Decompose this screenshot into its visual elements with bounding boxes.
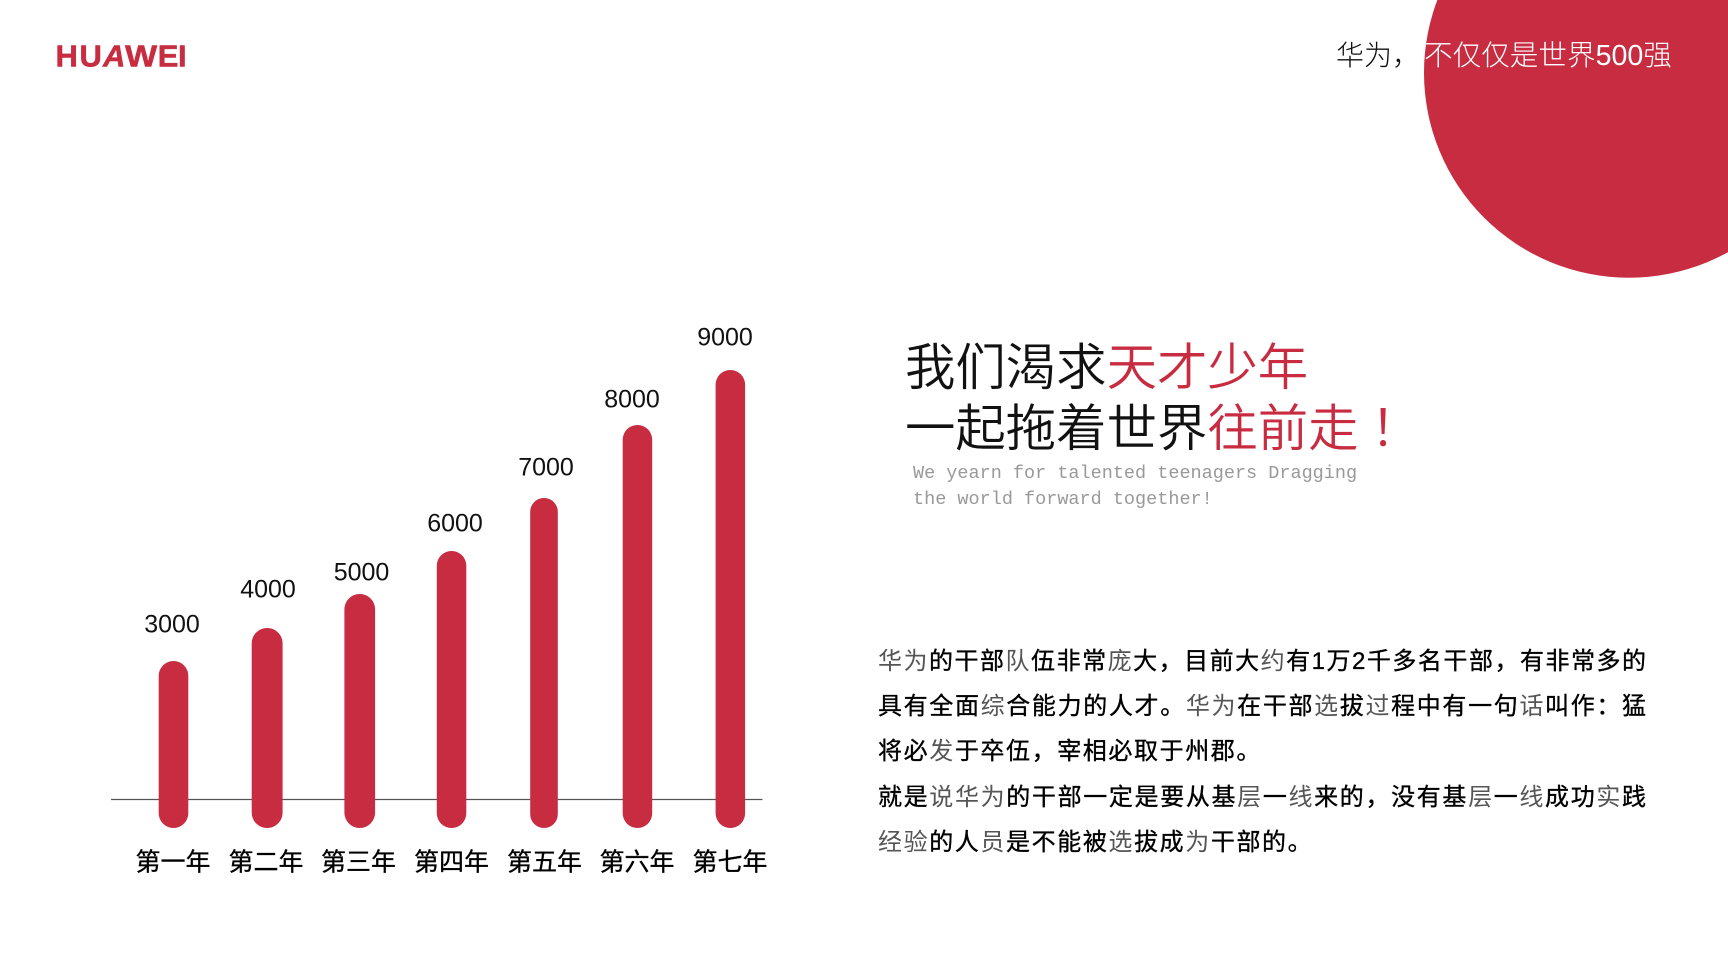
logo: HUAWEI: H <box>56 38 78 74</box>
value labels: 8000 <box>604 386 660 414</box>
logo: HUAWEI: A <box>102 38 125 74</box>
headline: 我们渴求天才少年 <box>905 339 1308 396</box>
logo: HUAWEI: U <box>80 38 102 74</box>
headline: 一起拖着世界往前走！ <box>905 400 1421 457</box>
category labels <box>135 848 768 876</box>
header text: 不仅仅是世界500强 <box>1424 40 1672 72</box>
English subtitle: We yearn for talented teenagers Dragging <box>913 463 1357 484</box>
category labels: 第三年 <box>321 848 396 876</box>
category labels: 第六年 <box>599 848 675 876</box>
value labels: 7000 <box>518 454 574 482</box>
category labels: 第二年 <box>228 848 304 876</box>
bars <box>159 370 745 828</box>
value labels: 3000 <box>144 611 200 639</box>
value labels: 5000 <box>334 559 389 587</box>
baseline axis <box>111 798 762 800</box>
headline <box>905 339 1421 457</box>
body paragraph: 经验的人员是不能被选拔成为干部的。 <box>878 829 1313 856</box>
category labels: 第五年 <box>507 848 582 876</box>
body paragraph: 华为的干部队伍非常庞大，目前大约有1万2千多名干部，有非常多的 <box>878 648 1646 675</box>
body paragraph: 具有全面综合能力的人才。华为在干部选拔过程中有一句话叫作：猛 <box>878 693 1646 720</box>
logo: HUAWEI: E <box>158 38 178 74</box>
value labels: 9000 <box>697 324 753 352</box>
category labels: 第七年 <box>692 848 768 876</box>
body paragraph: 就是说华为的干部一定是要从基层一线来的，没有基层一线成功实践 <box>878 784 1646 811</box>
logo: HUAWEI: I <box>178 38 187 74</box>
English subtitle: the world forward together! <box>913 489 1213 510</box>
logo: HUAWEI <box>56 38 187 74</box>
body paragraph: 将必发于卒伍，宰相必取于州郡。 <box>878 738 1262 765</box>
category labels: 第四年 <box>414 848 489 876</box>
bar chart <box>111 324 768 876</box>
decorative red circle <box>1424 0 1728 278</box>
body paragraph <box>878 648 1646 856</box>
category labels: 第一年 <box>135 848 211 876</box>
value labels: 4000 <box>240 576 296 604</box>
logo: HUAWEI: W <box>125 39 157 73</box>
value labels <box>144 324 753 639</box>
value labels: 6000 <box>427 510 483 538</box>
English subtitle <box>913 463 1357 510</box>
header text: 华为， <box>1336 40 1420 71</box>
